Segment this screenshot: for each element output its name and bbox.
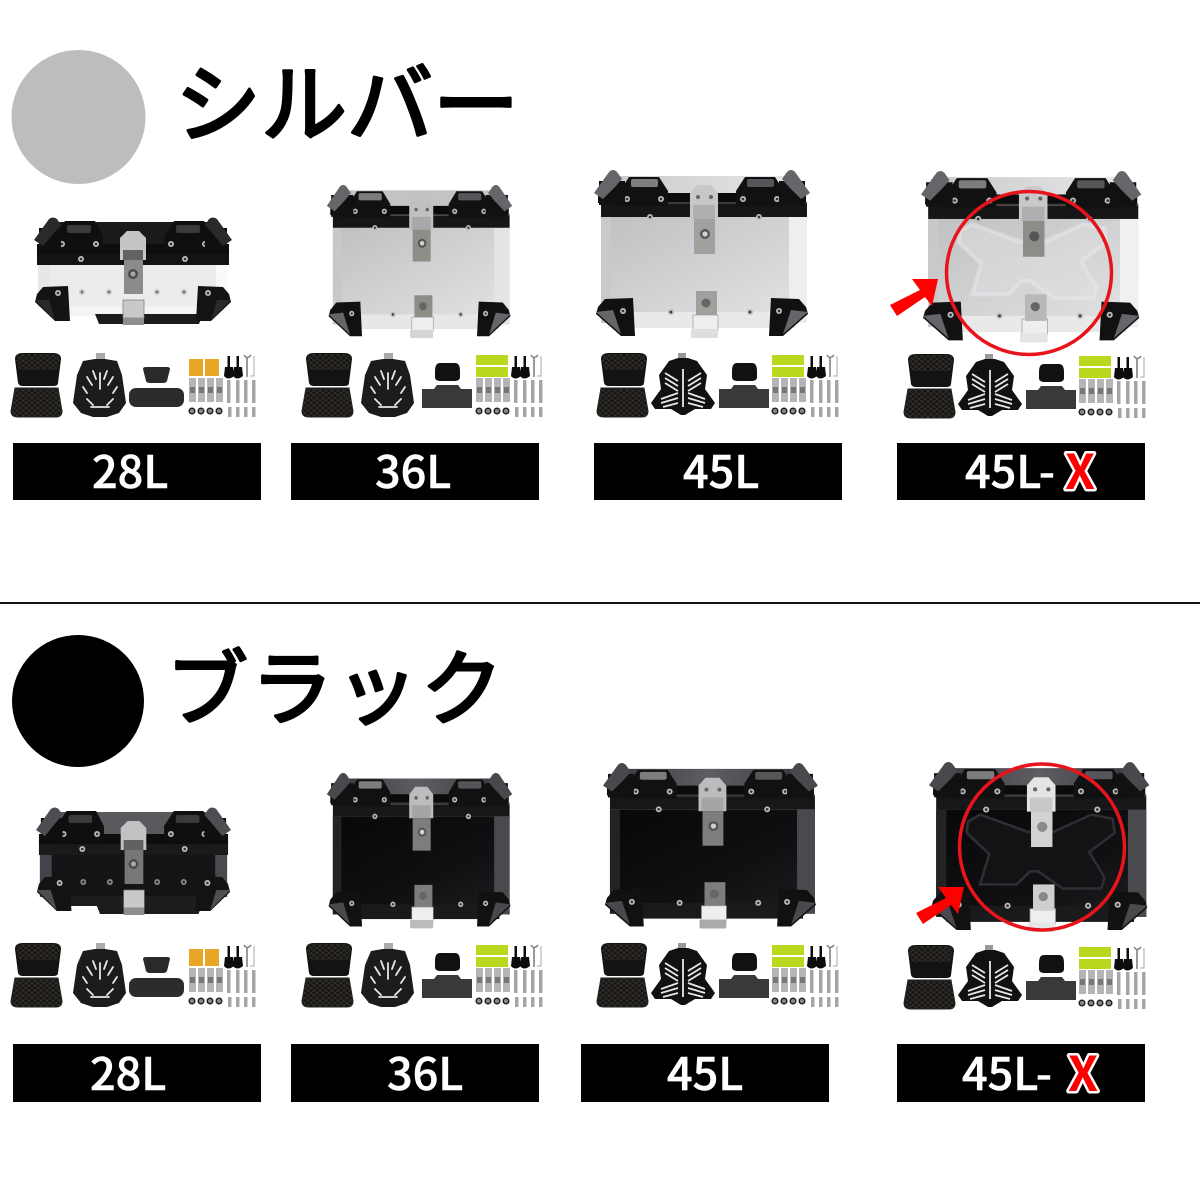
black label 28L: 28L: [90, 1038, 166, 1103]
silver 28L box: [34, 218, 232, 325]
black 45L box: [603, 763, 818, 928]
embossed X panel: [959, 224, 1107, 299]
silver 45L-X box: [921, 171, 1141, 342]
silver label 36L: [291, 436, 539, 501]
silver 36L box: [327, 185, 512, 338]
black label 45L-X: [897, 1035, 1145, 1105]
black accessories 28L: [11, 943, 256, 1007]
black label 45L-X: 45L-: [962, 1038, 1052, 1103]
silver label 45L: [594, 436, 842, 501]
black label 45L: 45L: [667, 1038, 743, 1103]
silver label 45L: 45L: [683, 436, 759, 501]
black arrow: [916, 887, 964, 924]
black swatch: [12, 635, 144, 767]
silver accessories 45L-X: [904, 354, 1146, 418]
embossed X panel: [967, 815, 1115, 889]
silver label 28L: [13, 436, 261, 501]
silver heading: シルバー: [175, 58, 519, 154]
black accessories 36L: [302, 943, 542, 1007]
black accessories 45L: [597, 943, 838, 1007]
silver accessories 28L: [11, 353, 256, 417]
silver label 45L-X: [897, 433, 1145, 503]
silver highlight circle: [946, 192, 1112, 354]
silver swatch: [12, 50, 146, 184]
silver label 45L-X: 45L-: [965, 436, 1055, 501]
silver arrow: [890, 279, 938, 316]
black label 28L: [13, 1038, 261, 1103]
silver label 45L-X: X: [1065, 433, 1095, 503]
black label 36L: 36L: [387, 1038, 463, 1103]
section divider: [0, 602, 1200, 604]
silver label 28L: 28L: [92, 436, 168, 501]
black 36L box: [327, 773, 512, 928]
silver accessories 36L: [302, 353, 542, 417]
black heading: ブラック: [166, 645, 506, 736]
silver 45L box: [594, 170, 810, 338]
black accessories 45L-X: [904, 945, 1146, 1009]
silver label 36L: 36L: [375, 436, 451, 501]
black highlight circle: [960, 764, 1124, 930]
black label 45L-X: X: [1068, 1035, 1098, 1105]
black label 36L: [291, 1038, 539, 1103]
silver accessories 45L: [597, 353, 838, 417]
black 28L box: [36, 808, 231, 915]
black 45L-X box: [929, 762, 1149, 932]
black label 45L: [581, 1038, 829, 1103]
